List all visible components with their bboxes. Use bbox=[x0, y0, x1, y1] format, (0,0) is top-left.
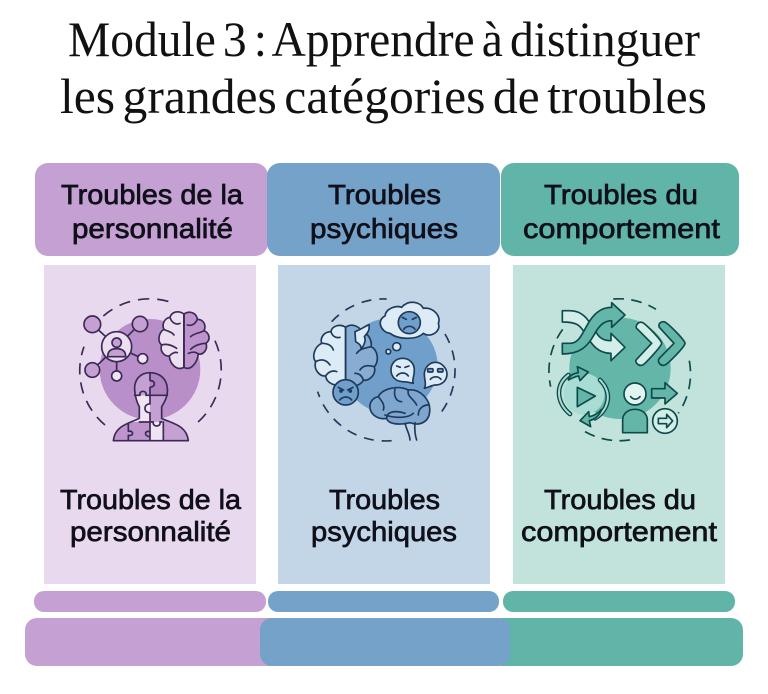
panel text: personnalité: Troubles de la bbox=[60, 484, 241, 515]
bottom bar: purple bbox=[25, 618, 285, 666]
title: Module 3 : Apprendre à distinguer bbox=[68, 11, 700, 67]
bottom bar: blue bbox=[260, 618, 510, 666]
panel text: comportement bbox=[521, 484, 717, 547]
header: psychiques: psychiques bbox=[310, 213, 458, 244]
panel text: psychiques: Troubles bbox=[329, 484, 440, 515]
panel text: psychiques: psychiques bbox=[311, 516, 457, 547]
header: personnalité bbox=[35, 163, 268, 256]
header: comportement bbox=[501, 163, 739, 256]
icon: personality network, brain and puzzle head bbox=[80, 299, 221, 442]
title: les grandes catégories de troubles bbox=[60, 68, 707, 124]
panel text: personnalité bbox=[60, 484, 241, 547]
panel text: comportement: comportement bbox=[521, 516, 717, 547]
icon: psychic brain and emotions bbox=[314, 299, 455, 441]
panel: comportement body bbox=[513, 265, 725, 584]
header: personnalité: Troubles de la bbox=[61, 179, 243, 210]
panel: psychiques body bbox=[278, 265, 490, 584]
header: psychiques: Troubles bbox=[328, 179, 441, 210]
pill: purple bbox=[34, 591, 266, 612]
panel: personnalité body bbox=[44, 265, 256, 584]
panel text: psychiques bbox=[311, 484, 457, 547]
header: comportement: comportement bbox=[523, 213, 720, 244]
title bbox=[60, 11, 707, 124]
pill: blue bbox=[268, 591, 499, 612]
pill: green bbox=[503, 591, 735, 612]
icon: behaviour arrows, cycle and person bbox=[549, 299, 691, 441]
header: psychiques bbox=[267, 163, 500, 256]
header: comportement: Troubles du bbox=[544, 179, 698, 210]
bottom bar: green bbox=[490, 618, 743, 666]
panel text: personnalité: personnalité bbox=[70, 516, 231, 547]
header: personnalité: personnalité bbox=[72, 213, 233, 244]
panel text: comportement: Troubles du bbox=[544, 484, 696, 515]
